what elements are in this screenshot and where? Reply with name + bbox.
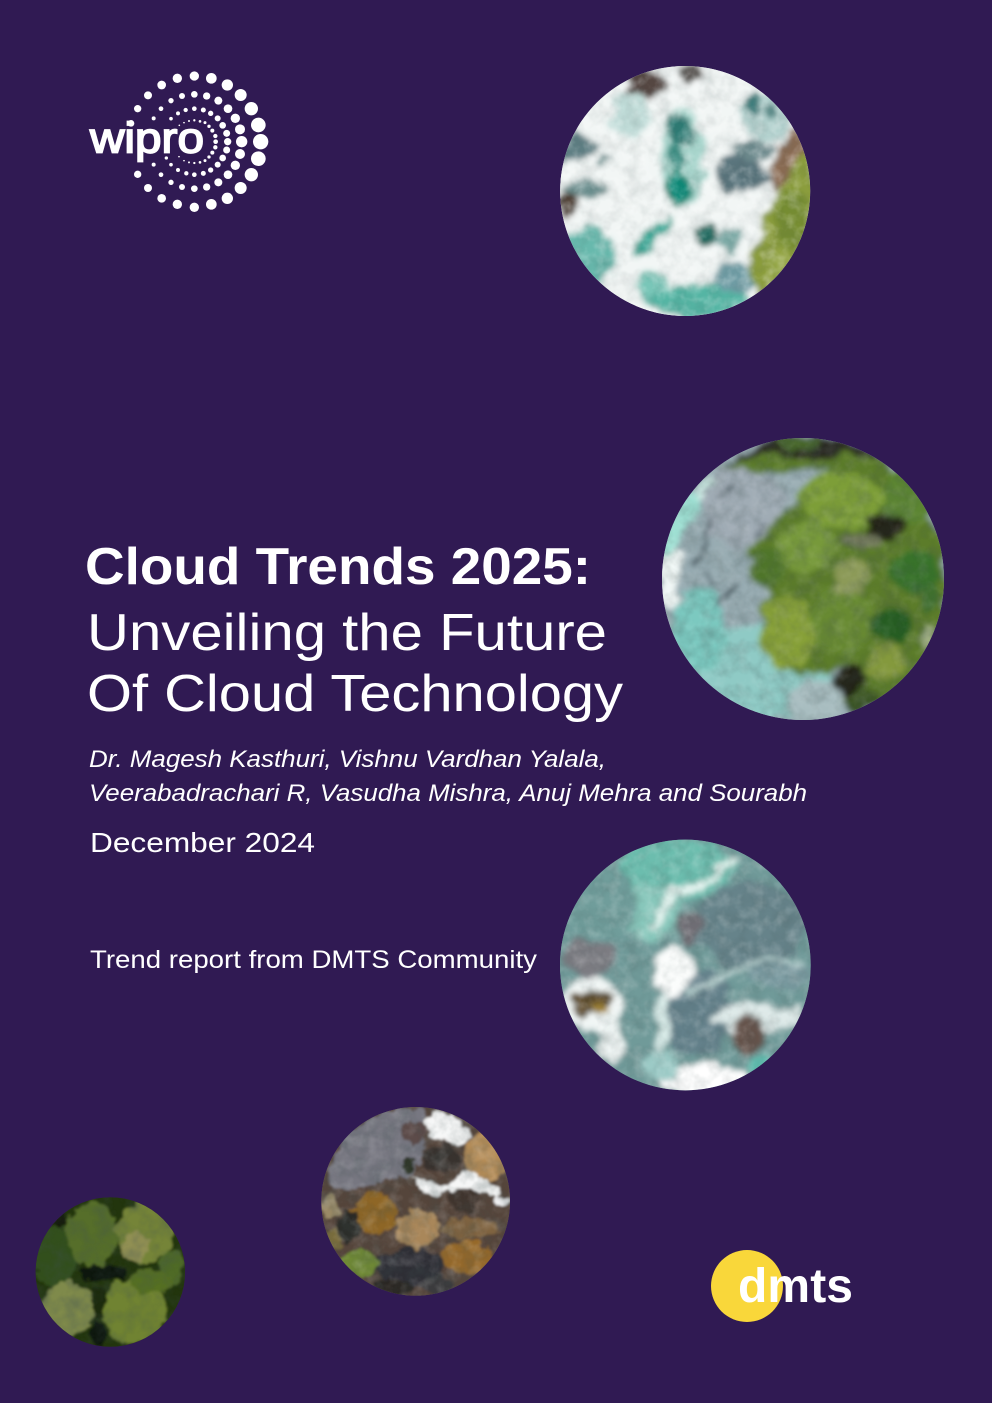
title line 1: Cloud Trends 2025: [85,538,591,596]
photo circle: turquoise water with rocks [560,840,811,1090]
logo wordmark: wipro [89,115,204,163]
dmts wordmark: dmts [738,1260,853,1313]
date: December 2024 [90,827,315,858]
report source line: Trend report from DMTS Community [90,946,538,974]
photo circle: rocky riverbed [321,1107,510,1296]
logo dots: inner ring [178,119,218,164]
authors [89,746,807,807]
dmts logo [711,1250,853,1322]
title line 2: Unveiling the Future [87,604,607,662]
logo dots: second ring [152,91,247,192]
photo circle: forest and water [662,438,944,720]
logo dots: third ring [165,106,231,177]
photo circle: white water rapids [560,66,810,316]
title line 3: Of Cloud Technology [87,665,623,723]
dmts yellow circle [711,1250,783,1322]
title [85,538,623,723]
photo circle: treetops [36,1197,185,1347]
wipro logo [89,71,268,212]
authors line 1: Dr. Magesh Kasthuri, Vishnu Vardhan Yalala, [89,746,606,773]
logo dots: outer ring [128,71,268,212]
authors line 2: Veerabadrachari R, Vasudha Mishra, Anuj Mehra and Sourabh [89,780,807,807]
